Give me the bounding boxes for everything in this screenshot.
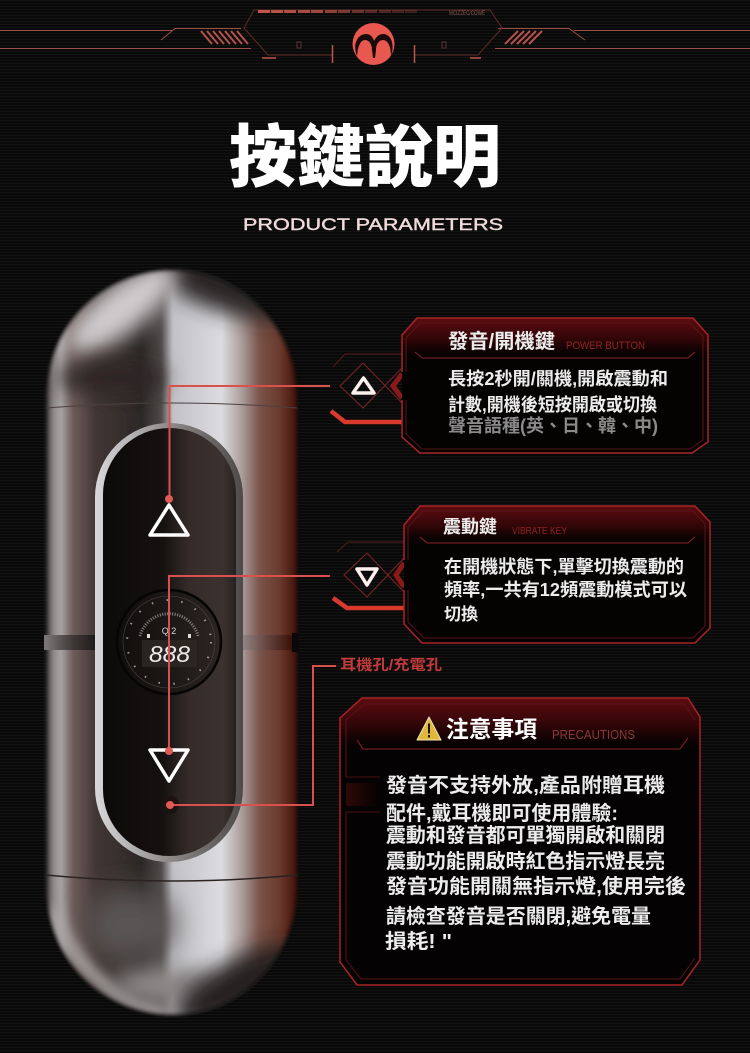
body text: 頻率,一共有12頻震動模式可以: [444, 580, 687, 600]
body text: 計數,開機後短按開啟或切換: [448, 394, 657, 415]
panel: vibrate key: [404, 506, 710, 643]
panel: precautions: [340, 698, 700, 985]
button up: [150, 505, 188, 535]
label: PRECAUTIONS: [552, 727, 635, 742]
label: VIBRATE KEY: [512, 526, 567, 537]
body text: 配件,戴耳機即可使用體驗:: [386, 801, 618, 825]
heading: 注意事項: [446, 716, 537, 742]
body text: 發音不支持外放,產品附贈耳機: [386, 773, 665, 797]
title: 按鍵說明: [229, 120, 501, 196]
control panel: [95, 423, 243, 862]
subtitle: PRODUCT PARAMETERS: [243, 215, 503, 234]
body text: 震動和發音都可單獨開啟和關閉: [386, 823, 665, 847]
capsule body: [44, 268, 298, 1017]
device capsule: [44, 268, 299, 1017]
body text: [448, 368, 668, 436]
body text: 長按2秒開/關機,開啟震動和: [448, 368, 668, 389]
dial: 888: [149, 641, 190, 667]
body text: 聲音語種(英、日、韓、中): [448, 415, 658, 436]
label: POWER BUTTON: [566, 340, 645, 352]
icon: warning triangle: [417, 717, 441, 740]
body text: 在開機狀態下,單擊切換震動的: [444, 557, 684, 577]
body text: 發音功能開關無指示燈,使用完後: [386, 874, 686, 898]
logo: [352, 23, 394, 65]
leader lines: [169, 386, 336, 805]
header frame: [0, 10, 750, 63]
indicator hole: [161, 796, 179, 814]
leader dots: [165, 495, 174, 809]
connector: vibrate: [333, 542, 434, 608]
header progress bars: [258, 10, 417, 13]
heading: 震動鍵: [443, 516, 497, 537]
button down: [150, 750, 188, 781]
body text: 震動功能開啟時紅色指示燈長亮: [386, 849, 665, 873]
dial: [117, 590, 221, 694]
side slots: [44, 633, 299, 652]
heading: 發音/開機鍵: [448, 329, 555, 353]
connector: power: [331, 354, 432, 422]
label: earphone and charging port: 耳機孔/充電孔: [340, 656, 443, 674]
header small label: MCIZZEC/COWE: [449, 11, 485, 17]
body text: [385, 773, 686, 953]
body text: 損耗! ": [385, 930, 452, 953]
body text: 請檢查發音是否關閉,避免電量: [386, 904, 651, 928]
body text: [444, 557, 687, 624]
seam lines: [46, 403, 297, 408]
body text: 切換: [444, 605, 478, 624]
dial: Q 2: [162, 626, 176, 636]
panel: power button: [402, 318, 708, 453]
